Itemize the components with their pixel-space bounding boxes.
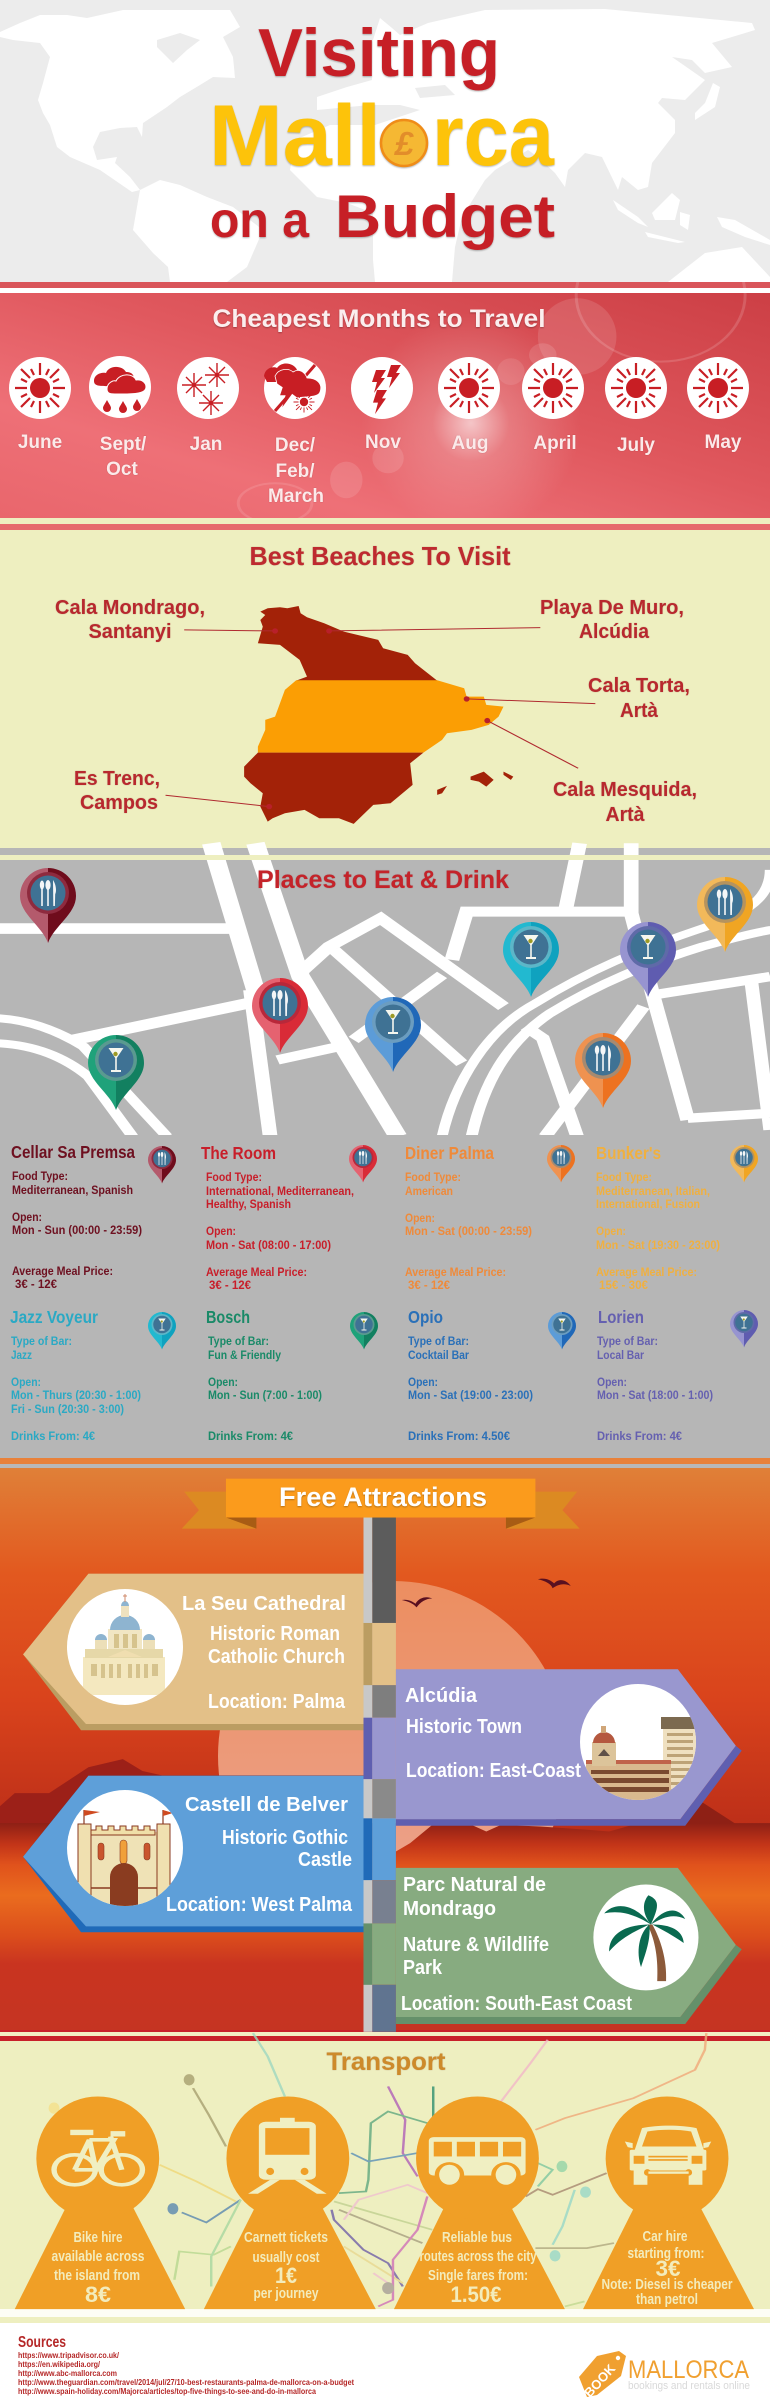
month labels: Jan — [190, 434, 222, 455]
icon: car front — [625, 2126, 711, 2185]
card: lorien: Drinks From: 4€ — [597, 1431, 683, 1443]
sign: parc natural de mondrago: Parc Natural de — [403, 1874, 546, 1896]
icon: jan snow — [177, 357, 239, 419]
small pin — [148, 1312, 176, 1350]
card: the room: 3€ - 12€ — [209, 1280, 252, 1292]
panel: reliable bus — [394, 2096, 565, 2309]
small pin — [730, 1145, 758, 1182]
heading: best beaches: Best Beaches To Visit — [250, 541, 511, 571]
map: mallorca in spanish flag colours — [244, 606, 513, 824]
sea and foreground ridge — [0, 1823, 770, 2030]
metro map lines — [49, 2033, 706, 2306]
beach labels — [55, 596, 697, 826]
month labels: June — [18, 432, 62, 453]
icon: birds — [402, 1579, 571, 1607]
panel: street map background — [0, 843, 770, 1458]
card: opio: Mon - Sat (19:00 - 23:00) — [408, 1390, 533, 1402]
card: bosch: Fun & Friendly — [208, 1350, 282, 1362]
panel: car hire: Note: Diesel is cheaper — [602, 2277, 733, 2293]
month labels — [18, 432, 742, 507]
title: Mall — [209, 88, 381, 184]
sign: castell de belver: Historic Gothic — [222, 1827, 348, 1849]
card: cellar sa premsa: Food Type: — [12, 1171, 68, 1183]
sign: la seu cathedral: La Seu Cathedral — [182, 1593, 346, 1615]
panel: carnett tickets: Carnett tickets — [244, 2230, 328, 2246]
sign: la seu cathedral — [23, 1574, 363, 1730]
icon: historic buildings — [586, 1717, 697, 1800]
logo: book mallorca — [579, 2351, 750, 2400]
panel: cheapest months background — [0, 282, 770, 518]
beach labels: Es Trenc, — [74, 767, 160, 790]
title — [209, 15, 555, 250]
card: jazz voyeur — [10, 1307, 176, 1443]
month labels: Nov — [365, 432, 401, 453]
card: bunker's: Open: — [596, 1226, 626, 1238]
beach labels: Artà — [620, 699, 659, 722]
card: diner palma: 3€ - 12€ — [408, 1280, 451, 1292]
map pin: diner palma — [575, 1033, 631, 1108]
card: bosch: Open: — [208, 1377, 238, 1389]
icon: may sun — [687, 357, 749, 419]
map pin: bosch — [88, 1035, 144, 1110]
icon: sept/oct rain cloud — [89, 356, 151, 418]
card: jazz voyeur: Open: — [11, 1377, 41, 1389]
card: opio: Drinks From: 4.50€ — [408, 1431, 511, 1443]
card: lorien: Open: — [597, 1377, 627, 1389]
month labels: Oct — [106, 459, 139, 480]
card: cellar sa premsa: Mediterranean, Spanish — [12, 1185, 133, 1197]
card: cellar sa premsa: Average Meal Price: — [12, 1266, 113, 1278]
icon: castle — [78, 1810, 173, 1906]
card: diner palma: Mon - Sat (00:00 - 23:59) — [405, 1226, 532, 1238]
panel: carnett tickets: usually cost — [252, 2250, 320, 2266]
icon: april sun — [522, 357, 584, 419]
panel: reliable bus: Single fares from: — [428, 2268, 528, 2284]
icon: june sun — [9, 357, 71, 419]
card: the room — [201, 1143, 377, 1292]
icon: palm tree — [604, 1895, 685, 1981]
card: diner palma: Diner Palma — [405, 1143, 494, 1163]
panel: car hire — [583, 2096, 754, 2309]
card: bosch: Bosch — [206, 1307, 250, 1327]
card: bunker's — [596, 1143, 758, 1292]
panel: bike hire: the island from — [54, 2268, 140, 2284]
month labels: Dec/ — [275, 435, 316, 456]
card: opio: Type of Bar: — [408, 1336, 469, 1348]
sign: castell de belver — [23, 1776, 363, 1932]
beach labels: Playa De Muro, — [540, 596, 684, 619]
sign: la seu cathedral: Historic Roman — [210, 1623, 340, 1645]
icon: dec/feb/march storm — [264, 357, 326, 419]
beach labels: Santanyi — [88, 620, 172, 643]
card: opio: Open: — [408, 1377, 438, 1389]
small pin — [349, 1145, 377, 1182]
card: bunker's: Average Meal Price: — [596, 1267, 697, 1279]
icon: pound coin: £ — [394, 125, 414, 162]
panel: free attractions sunset background — [0, 1458, 770, 2036]
map pin: cellar sa premsa — [20, 868, 76, 943]
panel: car hire: Car hire — [642, 2229, 688, 2245]
sources: http://www.abc-mallorca.com — [18, 2368, 117, 2378]
leader lines and beach markers — [166, 628, 595, 809]
title: rca — [432, 88, 555, 184]
card: the room: International, Mediterranean, — [206, 1186, 354, 1198]
icon: nov lightning — [351, 357, 413, 419]
card: the room: Healthy, Spanish — [206, 1199, 291, 1211]
card: lorien: Local Bar — [597, 1350, 644, 1362]
sign: alcudia: Location: East-Coast — [406, 1760, 581, 1782]
beach labels: Campos — [80, 791, 158, 814]
logo: book mallorca: bookings and rentals online — [628, 2380, 750, 2392]
panel: carnett tickets: per journey — [254, 2286, 318, 2302]
card: opio: Opio — [408, 1307, 443, 1327]
beach labels: Alcúdia — [579, 620, 650, 643]
panel: bike hire: available across — [52, 2249, 144, 2265]
card: bunker's: Bunker's — [596, 1143, 661, 1163]
panel: car hire: 3€ — [656, 2256, 680, 2281]
panel: reliable bus: 1.50€ — [450, 2282, 502, 2307]
card: cellar sa premsa: Open: — [12, 1212, 42, 1224]
card: diner palma — [405, 1143, 575, 1292]
sign: parc natural de mondrago — [396, 1868, 742, 2024]
card: bunker's: Mon - Sat (19:30 - 23:00) — [596, 1240, 720, 1252]
card: bosch: Type of Bar: — [208, 1336, 269, 1348]
panel: bike hire: Bike hire — [74, 2230, 122, 2246]
sign: castell de belver: Castle — [298, 1849, 352, 1871]
beach labels: Cala Mondrago, — [55, 596, 205, 619]
title: on a — [210, 192, 310, 248]
card: bunker's: International, Fusion — [596, 1199, 700, 1211]
sign: la seu cathedral: Location: Palma — [208, 1691, 346, 1713]
card: the room: Food Type: — [206, 1172, 262, 1184]
beach labels: Cala Mesquida, — [553, 778, 697, 801]
logo: book mallorca: BOOK — [581, 2361, 619, 2400]
month labels: March — [268, 486, 324, 507]
logo: book mallorca: MALLORCA — [628, 2356, 749, 2384]
beach labels: Cala Torta, — [588, 674, 690, 697]
card: jazz voyeur: Drinks From: 4€ — [11, 1431, 96, 1443]
card: lorien: Mon - Sat (18:00 - 1:00) — [597, 1390, 713, 1402]
small pin — [350, 1312, 378, 1350]
beach labels: Artà — [606, 803, 645, 826]
small pin — [547, 1145, 575, 1182]
month labels: Sept/ — [100, 434, 147, 455]
panel: transport background — [0, 2036, 770, 2323]
sign: parc natural de mondrago: Park — [403, 1957, 443, 1979]
panel: carnett tickets — [204, 2096, 376, 2309]
heading banner: free attractions: Free Attractions — [279, 1482, 487, 1512]
card: jazz voyeur: Mon - Thurs (20:30 - 1:00) — [11, 1390, 141, 1402]
panel: bike hire: 8€ — [85, 2282, 111, 2307]
sources: http://www.theguardian.com/travel/2014/jul/27/10-best-restaurants-palma-de-mallorca-on-a-budget — [18, 2377, 354, 2387]
card: jazz voyeur: Jazz Voyeur — [10, 1307, 98, 1327]
map pin: the room — [252, 978, 308, 1053]
card: cellar sa premsa: 3€ - 12€ — [15, 1279, 58, 1291]
title: Budget — [335, 183, 555, 250]
icon: pound coin — [381, 120, 427, 166]
sign: la seu cathedral: Catholic Church — [208, 1646, 345, 1668]
heading: cheapest months: Cheapest Months to Travel — [212, 305, 546, 333]
panel: reliable bus: Reliable bus — [442, 2230, 512, 2246]
icon: july sun — [605, 357, 667, 419]
card: opio: Cocktail Bar — [408, 1350, 469, 1362]
card: diner palma: Food Type: — [405, 1172, 461, 1184]
sign: alcudia — [396, 1669, 742, 1826]
panel: carnett tickets: 1€ — [275, 2263, 297, 2288]
sources — [18, 2334, 354, 2396]
card: bunker's: Food Type: — [596, 1172, 652, 1184]
card: the room: Average Meal Price: — [206, 1267, 307, 1279]
card: bosch — [206, 1307, 378, 1443]
header background with world map — [0, 0, 770, 282]
map pin: lorien — [620, 922, 676, 997]
small pin — [148, 1146, 176, 1184]
small pin — [548, 1312, 576, 1350]
card: cellar sa premsa — [11, 1142, 176, 1291]
sign: parc natural de mondrago: Nature & Wildlife — [403, 1934, 549, 1956]
card: diner palma: Open: — [405, 1213, 435, 1225]
card: jazz voyeur: Jazz — [11, 1350, 32, 1362]
icon: bus — [429, 2137, 526, 2187]
heading: transport: Transport — [326, 2048, 446, 2076]
heading banner: free attractions — [182, 1479, 580, 1529]
map pin: bunker's — [697, 877, 753, 952]
card: jazz voyeur: Type of Bar: — [11, 1336, 72, 1348]
sign: alcudia: Historic Town — [406, 1716, 522, 1738]
sign: castell de belver: Castell de Belver — [185, 1794, 348, 1816]
card: the room: Open: — [206, 1226, 236, 1238]
sources: https://www.tripadvisor.co.uk/ — [18, 2350, 120, 2360]
month labels: Aug — [452, 433, 488, 454]
signpost pole — [363, 1518, 396, 2032]
panel: reliable bus: routes across the city — [420, 2249, 536, 2265]
card: the room: Mon - Sat (08:00 - 17:00) — [206, 1240, 331, 1252]
stripes under header — [0, 282, 770, 293]
sign: parc natural de mondrago: Mondrago — [403, 1898, 496, 1920]
icon: train — [248, 2118, 327, 2194]
card: bosch: Mon - Sun (7:00 - 1:00) — [208, 1390, 322, 1402]
sign: alcudia: Alcúdia — [405, 1685, 478, 1707]
icon: aug sun — [438, 357, 500, 419]
card: the room: The Room — [201, 1143, 276, 1163]
card: diner palma: Average Meal Price: — [405, 1267, 506, 1279]
sign: parc natural de mondrago: Location: South-East Coast — [401, 1993, 632, 2015]
month labels: July — [617, 435, 655, 456]
icon: cathedral — [83, 1594, 165, 1695]
panel: car hire: than petrol — [636, 2292, 698, 2308]
small pin — [730, 1310, 758, 1348]
card: jazz voyeur: Fri - Sun (20:30 - 3:00) — [11, 1404, 124, 1416]
sources: Sources — [18, 2334, 66, 2351]
sign: castell de belver: Location: West Palma — [166, 1894, 353, 1916]
card: opio — [408, 1307, 576, 1443]
card: cellar sa premsa: Cellar Sa Premsa — [11, 1142, 135, 1162]
heading: places to eat and drink: Places to Eat & Drink — [257, 866, 509, 894]
card: bunker's: Mediterranean, Italian, — [596, 1186, 710, 1198]
card: lorien — [597, 1307, 758, 1443]
month labels: April — [533, 433, 577, 454]
card: cellar sa premsa: Mon - Sun (00:00 - 23:59) — [12, 1225, 142, 1237]
title: Visiting — [258, 15, 500, 91]
card: lorien: Type of Bar: — [597, 1336, 658, 1348]
map pin: jazz voyeur — [503, 922, 559, 997]
card: bosch: Drinks From: 4€ — [208, 1431, 294, 1443]
sources: http://www.spain-holiday.com/Majorca/articles/top-five-things-to-see-and-do-in-mallorca — [18, 2386, 316, 2396]
month labels: Feb/ — [275, 461, 315, 482]
card: diner palma: American — [405, 1186, 453, 1198]
icon: bicycle — [54, 2132, 142, 2185]
sources: https://en.wikipedia.org/ — [18, 2359, 101, 2369]
panel: car hire: starting from: — [628, 2246, 704, 2262]
card: lorien: Lorien — [598, 1307, 644, 1327]
panel: bike hire — [15, 2096, 185, 2309]
month labels: May — [705, 432, 742, 453]
card: bunker's: 15€ - 30€ — [599, 1280, 649, 1292]
map pin: opio — [365, 997, 421, 1072]
panel: best beaches background — [0, 518, 770, 848]
